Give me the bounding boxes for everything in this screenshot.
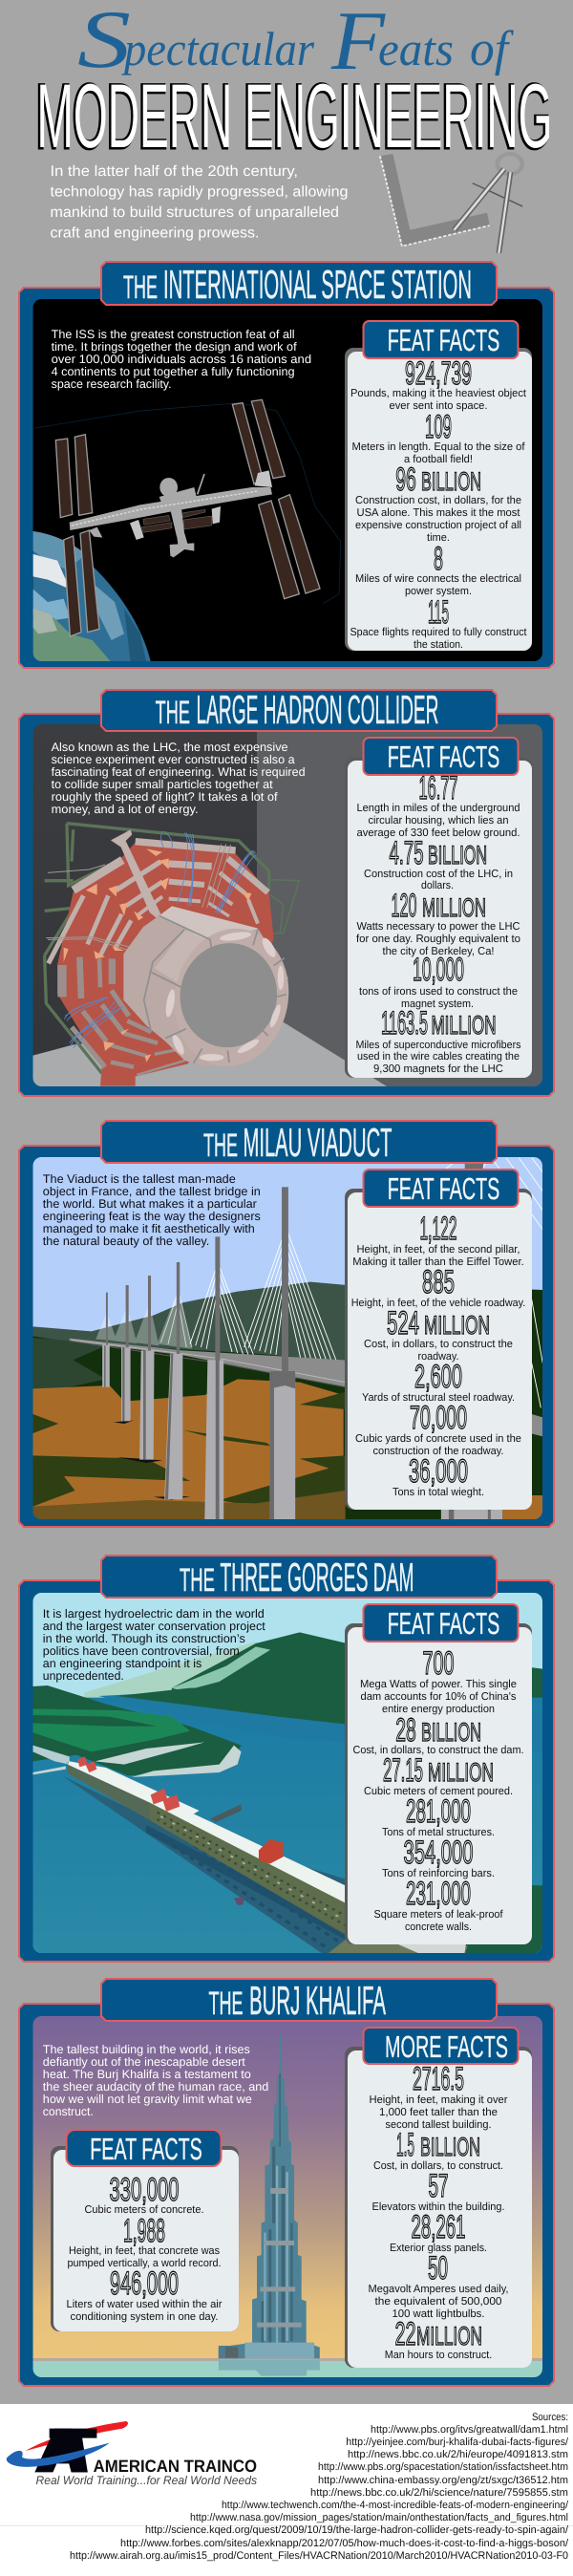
fact: pump height [67, 2213, 222, 2269]
intro paragraph [43, 1607, 265, 1683]
intro paragraph: It is largest hydroelectric dam in the world [43, 1607, 265, 1621]
fact: concrete: Cubic yards of concrete used in the [355, 1433, 521, 1445]
intro paragraph: to collide super small particles together at [52, 778, 273, 791]
section title tab [101, 1978, 497, 2023]
illustration: space station over earth [32, 299, 542, 662]
fact: power: Mega Watts of power. This single [360, 1679, 517, 1690]
intro paragraph: The ISS is the greatest construction feat of all [52, 328, 295, 341]
fact: cost: 1.5 [396, 2127, 414, 2163]
illustration: dam and river [32, 1593, 542, 1956]
fact: cost [355, 462, 521, 544]
intro paragraph [52, 328, 311, 391]
intro paragraph: politics have been controversial, from [43, 1644, 240, 1658]
fact: roadway height [351, 1264, 525, 1309]
fact: power: 100 watt lightbulbs. [392, 2308, 485, 2320]
fact: pillar height: Making it taller than the Eiffel Tower. [352, 1256, 524, 1268]
feat facts panel [51, 2130, 239, 2331]
fact: man hours [385, 2316, 492, 2361]
fact: metal: 281,000 [406, 1793, 471, 1830]
fact: cement: Cubic meters of cement poured. [364, 1786, 513, 1797]
fact: man hours: Man hours to construct. [385, 2350, 492, 2361]
intro paragraph: space research facility. [52, 377, 172, 391]
fact: tunnel length: circular housing, which lies an [369, 815, 508, 826]
sources list: http://www.pbs.org/itvs/greatwall/dam1.html [371, 2424, 568, 2436]
sources list: http://science.kqed.org/quest/2009/10/19/the-large-hadron-collider-gets-ready-to-spin-again/ [145, 2524, 569, 2536]
panel: Millau Viaduct [19, 1120, 554, 1527]
fact: power: Watts necessary to power the LHC [357, 921, 520, 933]
fact: weight [350, 355, 527, 412]
fact: weight: Pounds, making it the heaviest object [350, 388, 527, 399]
feat facts heading: FEAT FACTS [388, 740, 499, 774]
fact: cost: 4.75 [390, 835, 424, 871]
intro paragraph: engineering feat is the way the designers [43, 1210, 261, 1223]
fact: tunnel length [357, 770, 520, 839]
intro paragraph: science experiment ever constructed is also a [52, 753, 295, 766]
tagline: Real World Training...for Real World Needs [36, 2474, 257, 2487]
fact: elevators: Elevators within the building. [372, 2201, 504, 2213]
fact: water [67, 2265, 223, 2323]
sources list: http://www.pbs.org/spacestation/station/issfactsheet.htm [318, 2461, 568, 2473]
fact: weight: 924,739 [405, 355, 472, 392]
section title tab: BURJ KHALIFA [249, 1978, 386, 2023]
intro paragraph [43, 2043, 268, 2118]
fact: power: 50 [428, 2250, 448, 2286]
fact: microfibers: MILLION [432, 1011, 497, 1040]
intro paragraph: the natural beauty of the valley. [43, 1234, 209, 1248]
fact: walls: Square meters of leak-proof [374, 1909, 503, 1921]
illustration: viaduct in valley [32, 1157, 542, 1522]
intro text: craft and engineering prowess. [50, 225, 260, 241]
fact: weight: 36,000 [409, 1453, 468, 1490]
fact: microfibers: Miles of superconductive microfibers [355, 1040, 521, 1051]
intro paragraph: managed to make it fit aesthetically with [43, 1222, 255, 1235]
fact: pillar height [352, 1211, 524, 1268]
sources list: http://yeinjee.com/burj-khalifa-dubai-facts-figures/ [346, 2436, 569, 2448]
logo mark [7, 2421, 128, 2472]
panel: Large Hadron Collider [19, 687, 554, 1096]
section title tab: THE [208, 1986, 243, 2022]
fact: cement [364, 1752, 513, 1797]
panel frame [19, 1580, 554, 1962]
fact: tunnel length: average of 330 feet below ground. [357, 827, 520, 839]
fact: cost: BILLION [428, 841, 487, 869]
fact: cost: Cost, in dollars, to construct the [364, 1339, 513, 1350]
fact: walls [374, 1876, 503, 1933]
section title tab [101, 1555, 497, 1599]
section title tab [101, 687, 497, 732]
icon: ruler and compass [380, 154, 522, 253]
panel frame [19, 1146, 554, 1527]
intro paragraph: and the largest water conservation project [43, 1620, 265, 1633]
title script line [77, 0, 514, 88]
intro paragraph: defiantly out of the inescapable desert [43, 2055, 245, 2069]
fact: length [351, 409, 525, 465]
panel frame [19, 288, 554, 668]
fact: pump height: Height, in feet, that concrete was [69, 2245, 220, 2257]
fact: metal: Tons of metal structures. [382, 1827, 495, 1838]
intro paragraph: money, and a lot of energy. [52, 803, 199, 816]
fact: weight [393, 1453, 484, 1498]
fact: iron [359, 952, 518, 1010]
intro paragraph [43, 1172, 261, 1248]
sources list: http://www.airah.org.au/imis15_prod/Content_Files/HVACRNation/2010/March2010/HVACRNation2010-03-F0 [70, 2550, 568, 2562]
fact: wire: 8 [434, 541, 443, 577]
intro paragraph: over 100,000 individuals across 16 nations and [52, 353, 311, 366]
fact: tunnel length: Length in miles of the underground [357, 803, 520, 814]
fact: reinforcing bars [382, 1835, 495, 1879]
sources list [70, 2412, 569, 2562]
fact: cost: time. [427, 532, 450, 544]
intro paragraph: time. It brings together the design and work of [52, 340, 297, 354]
fact: height: 1,000 feet taller than the [379, 2107, 498, 2118]
more facts panel [345, 2028, 532, 2368]
fact: reinforcing bars: 354,000 [403, 1835, 474, 1871]
feat facts heading [363, 1170, 518, 1207]
panel frame [19, 714, 554, 1096]
fact: pillar height: 1,122 [420, 1211, 456, 1247]
fact: pillar height: Height, in feet, of the second pillar, [357, 1244, 520, 1256]
fact: power [356, 888, 520, 957]
fact: glass panels: 28,261 [411, 2209, 466, 2245]
section title tab: THE [156, 695, 190, 731]
fact: elevators [372, 2168, 504, 2213]
fact: cost [364, 1305, 513, 1363]
fact: cost [373, 2127, 503, 2172]
intro paragraph: heat. The Burj Khalifa is a testament to [43, 2068, 251, 2081]
fact: flights: 115 [428, 594, 449, 631]
fact: power [369, 2250, 508, 2320]
feat facts heading: FEAT FACTS [388, 323, 499, 357]
fact: power: Megavolt Amperes used daily, [369, 2284, 508, 2295]
intro paragraph: how we will not let gravity limit what we [43, 2093, 252, 2106]
feat facts heading [363, 321, 518, 358]
intro paragraph: the world. But what makes it a particular [43, 1197, 257, 1211]
section title tab: THE [203, 1127, 238, 1164]
intro paragraph: unprecedented. [43, 1669, 124, 1683]
fact: wire: power system. [405, 586, 472, 597]
fact: weight: Tons in total wieght. [393, 1487, 484, 1498]
fact: concrete: 70,000 [410, 1400, 467, 1436]
fact: microfibers [355, 1005, 521, 1075]
fact: concrete: Cubic meters of concrete. [84, 2204, 204, 2216]
fact: wire [355, 541, 521, 597]
intro text: technology has rapidly progressed, allowing [50, 183, 348, 201]
fact: power: the city of Berkeley, Ca! [382, 946, 495, 957]
fact: flights [350, 594, 527, 651]
intro paragraph: roughly the speed of light? It takes a lot of [52, 790, 278, 804]
fact: cost: Cost, in dollars, to construct the dam. [353, 1745, 523, 1756]
fact: cost: USA alone. This makes it the most [357, 507, 520, 519]
fact: height [369, 2061, 508, 2131]
feat facts panel [345, 321, 532, 651]
fact: cost: MILLION [424, 1311, 490, 1340]
fact: concrete [84, 2172, 204, 2216]
feat facts heading: FEAT FACTS [90, 2132, 202, 2166]
intro paragraph [52, 741, 306, 816]
fact: height: second tallest building. [386, 2119, 491, 2131]
feat facts heading [67, 2130, 222, 2166]
intro paragraph: in the world. Though its construction’s [43, 1632, 245, 1645]
more facts heading [363, 2028, 518, 2064]
illustration: tower at dusk [32, 2016, 542, 2377]
panel frame [19, 2004, 554, 2386]
fact: concrete [355, 1400, 521, 1457]
section title tab [101, 1120, 497, 1165]
fact: power: 120 [392, 888, 416, 924]
fact: cost: 524 [387, 1305, 419, 1342]
fact: glass panels [390, 2209, 487, 2254]
fact: reinforcing bars: Tons of reinforcing bars. [382, 1868, 495, 1879]
fact: height: Height, in feet, making it over [369, 2094, 508, 2106]
fact: power [360, 1645, 517, 1715]
fact: length: a football field! [404, 454, 473, 465]
title script line: eats [378, 22, 454, 75]
fact: power: 700 [422, 1645, 455, 1682]
section title tab: THE [123, 269, 158, 306]
panel: Three Gorges Dam [19, 1555, 554, 1962]
sources list: http://www.china-embassy.org/eng/zt/sxgc/t36512.htm [318, 2475, 568, 2486]
intro paragraph: 4 continents to put together a fully functioning [52, 365, 295, 378]
sources list: http://news.bbc.co.uk/2/hi/europe/4091813.stm [348, 2449, 568, 2460]
fact: microfibers: 1163.5 [381, 1005, 428, 1041]
fact: tunnel length: 16.77 [418, 770, 458, 806]
fact: power: for one day. Roughly equivalent to [356, 934, 520, 945]
feat facts heading [363, 738, 518, 775]
fact: cost [353, 1712, 523, 1756]
fact: water: conditioning system in one day. [71, 2311, 218, 2323]
fact: wire: Miles of wire connects the electrical [355, 573, 521, 585]
fact: length: Meters in length. Equal to the size of [351, 441, 525, 453]
fact: weight: ever sent into space. [390, 400, 487, 412]
fact: pump height: 1,988 [123, 2213, 165, 2249]
fact: man hours: MILLION [416, 2322, 482, 2351]
fact: iron: 10,000 [413, 952, 464, 988]
fact: cement: 27.15 [383, 1752, 423, 1789]
fact: power: the equivalent of 500,000 [374, 2296, 502, 2308]
fact: cost: expensive construction project of all [355, 520, 521, 531]
feat facts panel [345, 1604, 532, 1944]
fact: elevators: 57 [428, 2168, 449, 2204]
fact: power: dam accounts for 10% of China's [361, 1691, 517, 1703]
fact: water: 946,000 [110, 2265, 179, 2302]
fact: cost: Construction cost, in dollars, for the [355, 495, 521, 506]
fact: metal [382, 1793, 495, 1838]
fact: pump height: pumped vertically, a world record. [67, 2258, 222, 2269]
fact: cost: roadway. [418, 1351, 458, 1363]
sources list: http://www.forbes.com/sites/alexknapp/2012/07/05/how-much-does-it-cost-to-find-a-higgs-boson/ [120, 2538, 569, 2549]
fact: power: MILLION [422, 893, 486, 922]
fact: iron: magnet system. [401, 998, 474, 1010]
fact: microfibers: used in the wire cables creating the [357, 1051, 520, 1063]
intro paragraph: Also known as the LHC, the most expensive [52, 741, 288, 754]
section title tab: MILAU VIADUCT [243, 1120, 392, 1165]
fact: cost: Construction cost of the LHC, in [364, 869, 513, 880]
intro paragraph: construct. [43, 2105, 94, 2118]
fact: cost: 96 [395, 462, 416, 498]
intro text [50, 163, 348, 241]
fact: cost: Cost, in dollars, to construct. [373, 2160, 503, 2172]
company name: AMERICAN TRAINCO [94, 2457, 257, 2476]
fact: concrete: construction of the roadway. [372, 1446, 504, 1457]
feat facts heading: FEAT FACTS [388, 1606, 499, 1641]
intro text: mankind to build structures of unparalleled [50, 204, 339, 221]
fact: walls: 231,000 [406, 1876, 471, 1912]
logo: American Trainco [7, 2421, 257, 2487]
feat facts panel [345, 738, 532, 1078]
illustration: collider magnet [32, 724, 543, 1086]
feat facts heading [363, 1604, 518, 1642]
footer background [0, 2404, 573, 2576]
title script line: of [470, 22, 514, 76]
fact: concrete: 330,000 [109, 2172, 180, 2208]
fact: cost: BILLION [421, 467, 481, 496]
intro paragraph: the sheer audacity of the human race, and [43, 2080, 268, 2093]
fact: length: 109 [425, 409, 452, 445]
sources list: http://news.bbc.co.uk/2/hi/science/nature/7595855.stm [310, 2487, 568, 2499]
fact: steel: Yards of structural steel roadway. [362, 1392, 515, 1404]
fact: glass panels: Exterior glass panels. [390, 2243, 487, 2254]
intro paragraph: object in France, and the tallest bridge in [43, 1185, 261, 1198]
fact: cost: BILLION [421, 1718, 481, 1747]
panel: International Space Station [19, 262, 554, 668]
intro paragraph: an engineering standpoint it is [43, 1657, 202, 1670]
fact: roadway height: 885 [422, 1264, 455, 1300]
fact: flights: Space flights required to fully construct [350, 627, 527, 638]
fact: power: entire energy production [382, 1704, 495, 1715]
fact: cost: 28 [395, 1712, 416, 1749]
section title tab: THE [180, 1562, 215, 1599]
fact: steel [362, 1359, 515, 1404]
fact: cost: BILLION [420, 2133, 480, 2161]
fact: man hours: 22 [395, 2316, 416, 2352]
sources list: Sources: [532, 2412, 568, 2423]
feat facts panel [345, 1170, 532, 1510]
fact: iron: tons of irons used to construct the [359, 986, 518, 998]
feat facts heading: FEAT FACTS [388, 1171, 499, 1206]
fact: walls: concrete walls. [405, 1921, 472, 1933]
fact: cost: dollars. [421, 880, 454, 891]
fact: roadway height: Height, in feet, of the vehicle roadway. [351, 1298, 525, 1309]
fact: cost [364, 835, 513, 891]
intro paragraph: fascinating feat of engineering. What is required [52, 765, 306, 779]
title script line: pectacular [121, 22, 314, 75]
panel: Burj Khalifa [19, 1978, 554, 2386]
fact: height: 2716.5 [413, 2061, 464, 2097]
fact: flights: the station. [414, 639, 463, 651]
fact: steel: 2,600 [414, 1359, 462, 1395]
fact: water: Liters of water used within the air [67, 2299, 223, 2310]
title [35, 0, 552, 168]
intro paragraph: The tallest building in the world, it rises [43, 2043, 250, 2056]
fact: microfibers: 9,300 magnets for the LHC [373, 1063, 503, 1075]
intro text: In the latter half of the 20th century, [50, 163, 298, 180]
fact: cement: MILLION [428, 1758, 494, 1787]
intro paragraph: The Viaduct is the tallest man-made [43, 1172, 236, 1186]
